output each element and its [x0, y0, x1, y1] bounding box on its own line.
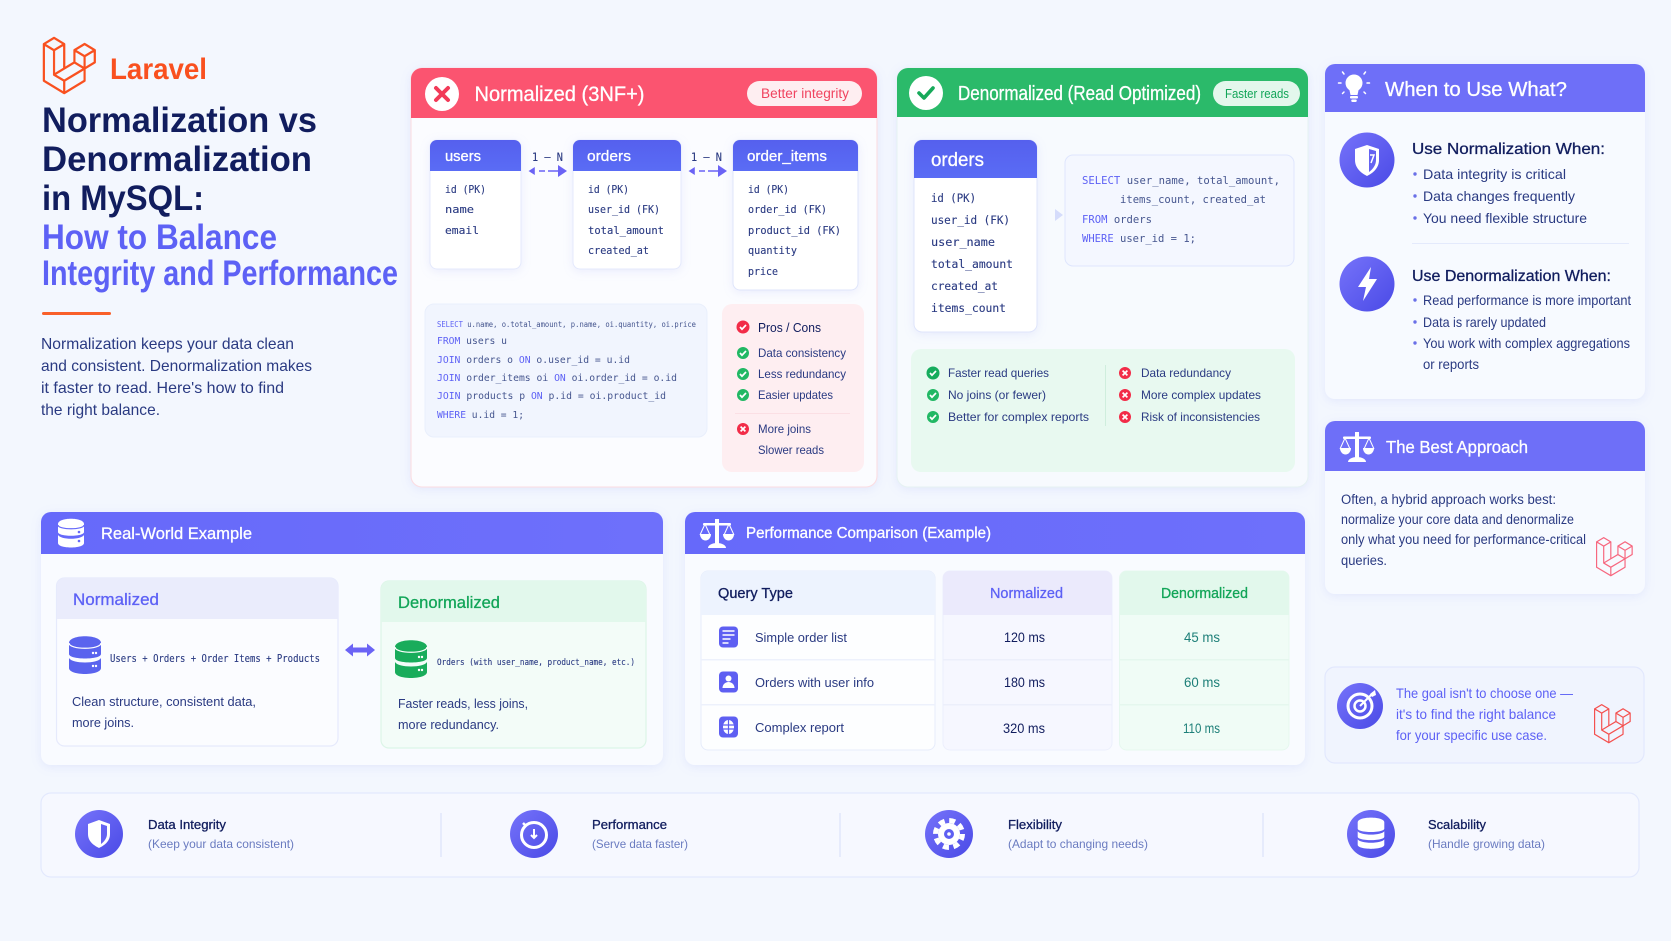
table: denormalized orders: total_amount	[931, 258, 1013, 271]
table: users: users	[445, 148, 481, 165]
goal text: for your specific use case.	[1396, 727, 1547, 743]
when header	[1325, 64, 1645, 112]
benefit: flexibility	[925, 810, 1148, 858]
benefit: data integrity: Data Integrity	[148, 817, 226, 832]
use denormalization list: Use Denormalization When:	[1412, 268, 1611, 285]
goal text: it's to find the right balance	[1396, 706, 1556, 722]
icon: scales	[700, 519, 734, 548]
table: orders: total_amount	[588, 225, 664, 237]
arrow: users to orders	[530, 150, 567, 177]
table: normalized column: 320 ms	[1003, 721, 1045, 736]
badge: faster reads: Faster reads	[1225, 86, 1289, 101]
table: order_items	[733, 140, 858, 290]
panel: normalized	[411, 68, 877, 487]
table: order_items: price	[748, 266, 778, 278]
pros and cons: normalized: Data consistency	[758, 346, 846, 360]
icon: cross badge	[425, 77, 459, 111]
pros and cons: denormalized	[911, 349, 1295, 472]
table: normalized column: 180 ms	[1004, 675, 1045, 690]
table: normalized column	[943, 571, 1112, 750]
table: order_items: product_id (FK)	[748, 225, 841, 237]
card: normalized example	[56, 578, 338, 746]
icon: Laravel logo red	[1594, 704, 1631, 743]
sql: denormalized query: SELECT user_name, total_amount,	[1082, 174, 1280, 187]
use normalization list: Data integrity is critical	[1423, 166, 1566, 182]
goal text	[1396, 685, 1573, 743]
benefit: data integrity	[75, 810, 294, 858]
pros and cons: denormalized: More complex updates	[1141, 388, 1261, 402]
table: users: id (PK)	[445, 184, 486, 196]
pros and cons: denormalized: Faster read queries	[948, 366, 1049, 380]
table: denormalized column: Denormalized	[1161, 586, 1248, 602]
intro paragraph: and consistent. Denormalization makes	[41, 358, 312, 375]
table: order_items: quantity	[748, 245, 797, 257]
wordmark: Laravel	[110, 53, 207, 86]
sql: normalized query	[425, 304, 707, 437]
normalized header	[411, 68, 877, 118]
icon: light bulb	[1338, 72, 1370, 102]
table: query type column: Complex report	[755, 720, 844, 735]
table: normalized column: Normalized	[990, 586, 1063, 602]
sql: denormalized query: FROM orders	[1082, 213, 1152, 226]
arrow: users to orders: 1 — N	[532, 150, 563, 164]
best approach text: normalize your core data and denormalize	[1341, 512, 1574, 527]
intro paragraph	[41, 336, 312, 419]
benefit: scalability: (Handle growing data)	[1428, 837, 1545, 851]
table: query type column: Simple order list	[755, 630, 847, 645]
table: query type column: Orders with user info	[755, 675, 874, 690]
use normalization list	[1412, 141, 1605, 226]
normalized heading: Normalized (3NF+)	[474, 83, 644, 106]
benefit: scalability: Scalability	[1428, 817, 1486, 832]
icon: green database	[395, 640, 427, 678]
table: orders	[573, 140, 681, 269]
best approach text: queries.	[1341, 553, 1387, 568]
real-world header	[41, 512, 663, 554]
best approach text: only what you need for performance-critical	[1341, 532, 1586, 547]
table: order_items: order_items	[747, 148, 827, 165]
sql: normalized query: JOIN orders o ON o.user_id = u.id	[437, 355, 630, 366]
benefit: flexibility: Flexibility	[1008, 817, 1062, 832]
title: Integrity and Performance	[42, 254, 398, 293]
icon: database	[58, 519, 84, 548]
callout: the goal	[1325, 667, 1644, 763]
panel: denormalized	[897, 68, 1308, 487]
pros and cons: denormalized: Better for complex reports	[948, 410, 1089, 424]
card: denormalized example: more redundancy.	[398, 717, 499, 732]
pros and cons: normalized: More joins	[758, 422, 811, 436]
table: query type column	[701, 571, 935, 750]
sql: denormalized query: items_count, created_at	[1120, 193, 1266, 206]
benefit: flexibility: (Adapt to changing needs)	[1008, 837, 1148, 851]
intro paragraph: Normalization keeps your data clean	[41, 336, 294, 353]
card: normalized example: Users + Orders + Order Items + Products	[110, 653, 320, 665]
table: denormalized column: 110 ms	[1183, 721, 1220, 736]
card: denormalized example: Denormalized	[398, 593, 500, 612]
icon: user	[719, 672, 738, 692]
panel: when to use what	[1325, 64, 1645, 399]
pros and cons: denormalized: No joins (or fewer)	[948, 388, 1046, 402]
use denormalization list: You work with complex aggregations	[1423, 335, 1630, 351]
table: users: email	[445, 225, 479, 237]
title	[42, 101, 398, 293]
performance header	[685, 512, 1305, 554]
use denormalization list: Data is rarely updated	[1423, 314, 1546, 330]
title: Normalization vs	[42, 101, 317, 140]
best approach text: Often, a hybrid approach works best:	[1341, 492, 1556, 507]
use normalization list: You need flexible structure	[1423, 210, 1587, 226]
denormalized heading: Denormalized (Read Optimized)	[958, 83, 1201, 105]
use normalization list: Use Normalization When:	[1412, 141, 1605, 158]
icon: check badge	[909, 76, 943, 110]
denormalized header	[897, 68, 1308, 117]
title: Denormalization	[42, 140, 312, 179]
sql: normalized query: SELECT u.name, o.total_amount, p.name, oi.quantity, oi.price	[437, 319, 696, 329]
table: denormalized orders: items_count	[931, 302, 1006, 315]
sql: denormalized query: WHERE user_id = 1;	[1082, 232, 1196, 245]
benefit: performance	[510, 810, 688, 858]
table: orders: user_id (FK)	[588, 204, 660, 216]
pros and cons: normalized: Pros / Cons	[758, 320, 821, 335]
icon: blue database	[69, 636, 101, 674]
benefit: performance: (Serve data faster)	[592, 837, 688, 851]
use normalization list: Data changes frequently	[1423, 188, 1575, 204]
sql: normalized query: FROM users u	[437, 336, 507, 347]
benefit: data integrity: (Keep your data consistent)	[148, 837, 294, 851]
panel: bottom benefits bar	[41, 793, 1639, 877]
intro paragraph: it faster to read. Here's how to find	[41, 380, 284, 397]
arrow: orders to order_items: 1 — N	[691, 150, 722, 164]
title: How to Balance	[42, 218, 277, 257]
table: denormalized orders: orders	[931, 150, 984, 171]
best approach heading: The Best Approach	[1386, 437, 1528, 457]
pros and cons: normalized: Slower reads	[758, 443, 824, 457]
use denormalization list: Read performance is more important	[1423, 292, 1631, 308]
table: denormalized orders: id (PK)	[931, 192, 976, 205]
card: denormalized example	[381, 581, 646, 748]
icon: list	[719, 626, 738, 648]
icon: scales	[1340, 432, 1374, 462]
benefit: scalability	[1347, 810, 1545, 858]
table: normalized column: 120 ms	[1004, 630, 1045, 645]
card: normalized example: more joins.	[72, 715, 134, 730]
best approach header	[1325, 421, 1645, 471]
sql: normalized query: JOIN order_items oi ON oi.order_id = o.id	[437, 373, 677, 384]
pros and cons: normalized	[722, 304, 864, 472]
icon: target	[1337, 683, 1383, 729]
intro paragraph: the right balance.	[41, 402, 160, 419]
table: denormalized orders: user_name	[931, 236, 995, 249]
benefit: performance: Performance	[592, 817, 667, 832]
table: denormalized orders	[914, 140, 1037, 332]
icon: Laravel logo	[43, 37, 96, 94]
badge: better integrity: Better integrity	[761, 86, 849, 101]
table: denormalized column: 45 ms	[1184, 630, 1220, 645]
table: users: name	[445, 204, 474, 216]
sql: denormalized query	[1065, 155, 1294, 266]
when heading: When to Use What?	[1385, 79, 1567, 101]
table: denormalized column: 60 ms	[1184, 675, 1220, 690]
icon: lightning bolt	[1340, 256, 1394, 312]
pros and cons: normalized: Less redundancy	[758, 367, 846, 381]
title: in MySQL:	[42, 179, 204, 218]
sql: normalized query: JOIN products p ON p.id = oi.product_id	[437, 391, 666, 402]
icon: Laravel logo pink	[1596, 537, 1633, 576]
performance heading: Performance Comparison (Example)	[746, 525, 991, 542]
arrow: orders to order_items	[690, 150, 727, 177]
table: query type column: Query Type	[718, 586, 793, 602]
real-world heading: Real-World Example	[101, 524, 252, 543]
table: orders: created_at	[588, 245, 649, 257]
table: orders: id (PK)	[588, 184, 629, 196]
brand: Laravel logo and wordmark	[43, 37, 207, 94]
table: order_items: id (PK)	[748, 184, 789, 196]
table: denormalized column	[1120, 571, 1289, 750]
card: normalized example: Clean structure, consistent data,	[72, 694, 256, 709]
badge: better integrity	[747, 81, 862, 106]
panel: real-world example	[41, 512, 663, 765]
card: denormalized example: Orders (with user_name, product_name, etc.)	[437, 658, 635, 668]
table: order_items: order_id (FK)	[748, 204, 827, 216]
pros and cons: normalized: Easier updates	[758, 388, 833, 402]
pros and cons: denormalized: Risk of inconsistencies	[1141, 410, 1260, 424]
panel: the best approach	[1325, 421, 1645, 594]
use denormalization list: or reports	[1423, 356, 1479, 372]
card: normalized example: Normalized	[73, 590, 159, 609]
badge: faster reads	[1213, 81, 1300, 106]
use denormalization list	[1412, 268, 1631, 372]
best approach text	[1341, 492, 1586, 568]
icon: shield	[1340, 132, 1394, 188]
card: denormalized example: Faster reads, less joins,	[398, 696, 528, 711]
icon: report	[719, 716, 738, 738]
arrow: table to query	[1055, 209, 1063, 221]
table: denormalized orders: created_at	[931, 280, 998, 293]
sql: normalized query: WHERE u.id = 1;	[437, 410, 524, 421]
pros and cons: denormalized: Data redundancy	[1141, 366, 1231, 380]
table: users	[430, 140, 521, 269]
panel: performance comparison	[685, 512, 1305, 765]
arrow: two-way	[345, 644, 375, 656]
table: orders: orders	[587, 148, 631, 165]
table: denormalized orders: user_id (FK)	[931, 214, 1010, 227]
goal text: The goal isn't to choose one —	[1396, 685, 1573, 701]
